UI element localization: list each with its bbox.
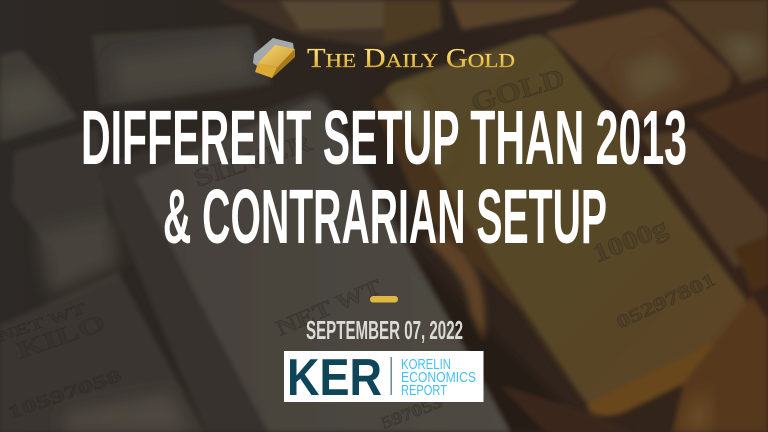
date: SEPTEMBER 07, 2022 <box>306 315 463 345</box>
engraved bar stamps: 10597058 <box>5 365 124 423</box>
logo: Korelin Economics Report: REPORT <box>401 383 447 399</box>
engraved bar stamps: 1000g <box>588 212 672 269</box>
icon: gold bar <box>253 38 295 78</box>
logo: The Daily Gold <box>253 38 515 78</box>
logo: Korelin Economics Report: KORELIN <box>401 357 451 373</box>
logo: Korelin Economics Report: ECONOMICS <box>401 370 476 386</box>
main gold bar <box>384 35 748 405</box>
accent dash <box>370 296 398 302</box>
engraved bar stamps: 05297801 <box>613 269 719 334</box>
engraved bar stamps: KILO <box>13 310 109 365</box>
engraved bar stamps: 597053 <box>379 392 445 432</box>
engraved bar stamps: NET WT <box>272 274 385 341</box>
title <box>81 95 687 260</box>
lower right gold bars <box>640 130 768 268</box>
logo: Korelin Economics Report: KER <box>287 349 382 407</box>
dark gap and bronze curve <box>412 250 590 432</box>
logo wordmark: THE DAILY GOLD <box>307 43 515 73</box>
upper gold bars <box>215 0 440 48</box>
engraved bar stamps: SILVER <box>191 129 316 193</box>
main silver bar <box>98 92 512 432</box>
logo: Korelin Economics Report <box>284 349 484 407</box>
left silver bars <box>0 50 78 142</box>
engraved bar stamps: GOLD <box>467 62 568 118</box>
